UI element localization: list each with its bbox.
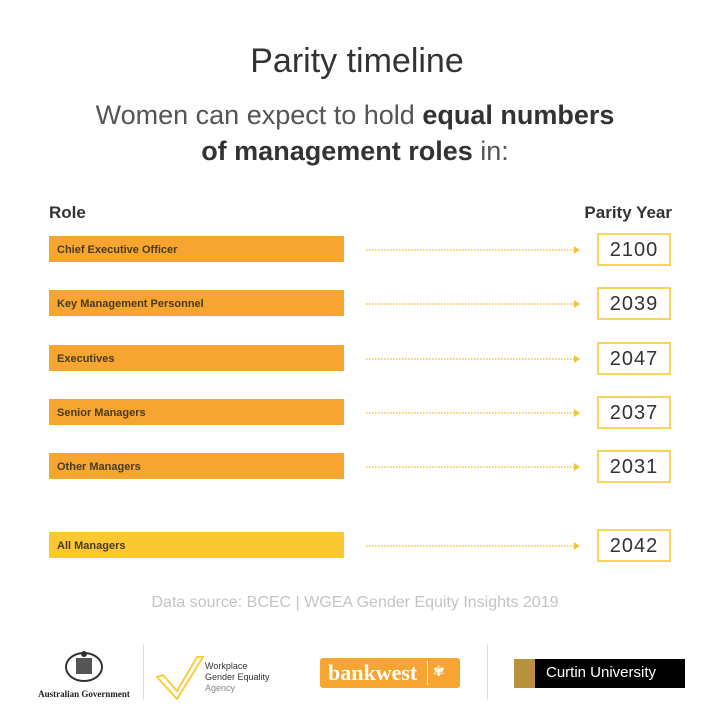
bar: KMP: Key Management Personnel xyxy=(57,298,204,310)
arrow xyxy=(366,246,580,254)
header: role: Role xyxy=(49,203,86,222)
subtitle: of management roles in: xyxy=(201,136,509,166)
year box xyxy=(597,529,671,562)
row: Other xyxy=(49,450,671,483)
year box: 2031 xyxy=(610,456,658,478)
subtitle xyxy=(96,100,614,166)
row: Senior xyxy=(49,396,671,429)
year box: 2037 xyxy=(610,402,658,424)
title: Parity timeline xyxy=(250,42,464,80)
bar: Executives xyxy=(49,345,344,371)
bar: All Managers: All Managers xyxy=(57,540,125,552)
logo: bankwest: ✾ xyxy=(433,663,445,679)
bar: All Managers xyxy=(49,532,344,558)
arrow xyxy=(366,542,580,550)
header: parity year: Parity Year xyxy=(584,203,672,222)
year box xyxy=(597,450,671,483)
arrow xyxy=(366,463,580,471)
year box xyxy=(597,396,671,429)
year box: 2042 xyxy=(610,535,658,557)
year box: 2047 xyxy=(610,348,658,370)
bar: KMP xyxy=(49,290,344,316)
bar: Senior Managers: Senior Managers xyxy=(57,407,146,419)
logo: WGEA: Agency xyxy=(205,683,235,693)
bar: CEO: Chief Executive Officer xyxy=(57,244,177,256)
bar: Senior Managers xyxy=(49,399,344,425)
bar: Other Managers: Other Managers xyxy=(57,461,141,473)
arrow xyxy=(366,355,580,363)
row: KMP xyxy=(49,287,671,320)
year box xyxy=(597,342,671,375)
year box xyxy=(597,287,671,320)
logo: WGEA xyxy=(155,656,270,700)
arrow xyxy=(366,300,580,308)
bar: CEO xyxy=(49,236,344,262)
subtitle: Women can expect to hold equal numbers xyxy=(96,100,614,130)
logo: Australian Government xyxy=(38,651,130,699)
logo: Curtin University: Curtin University xyxy=(546,664,656,681)
year box: 2039 xyxy=(610,293,658,315)
logo: WGEA: Workplace xyxy=(205,661,247,671)
arrow xyxy=(366,409,580,417)
data source: Data source: BCEC | WGEA Gender Equity Insights 2019 xyxy=(151,594,558,611)
logo: WGEA: Gender Equality xyxy=(205,672,270,682)
row: Executives xyxy=(49,342,671,375)
logo: bankwest xyxy=(320,658,460,688)
year box: 2100 xyxy=(610,239,658,261)
logo: Australian Government: Australian Government xyxy=(38,689,130,699)
logo: bankwest: bankwest xyxy=(328,660,417,685)
row: CEO xyxy=(49,233,671,266)
row: All xyxy=(49,529,671,562)
year box xyxy=(597,233,671,266)
bar: Other Managers xyxy=(49,453,344,479)
logo: Curtin University xyxy=(514,659,685,688)
bar: Executives: Executives xyxy=(57,353,114,365)
